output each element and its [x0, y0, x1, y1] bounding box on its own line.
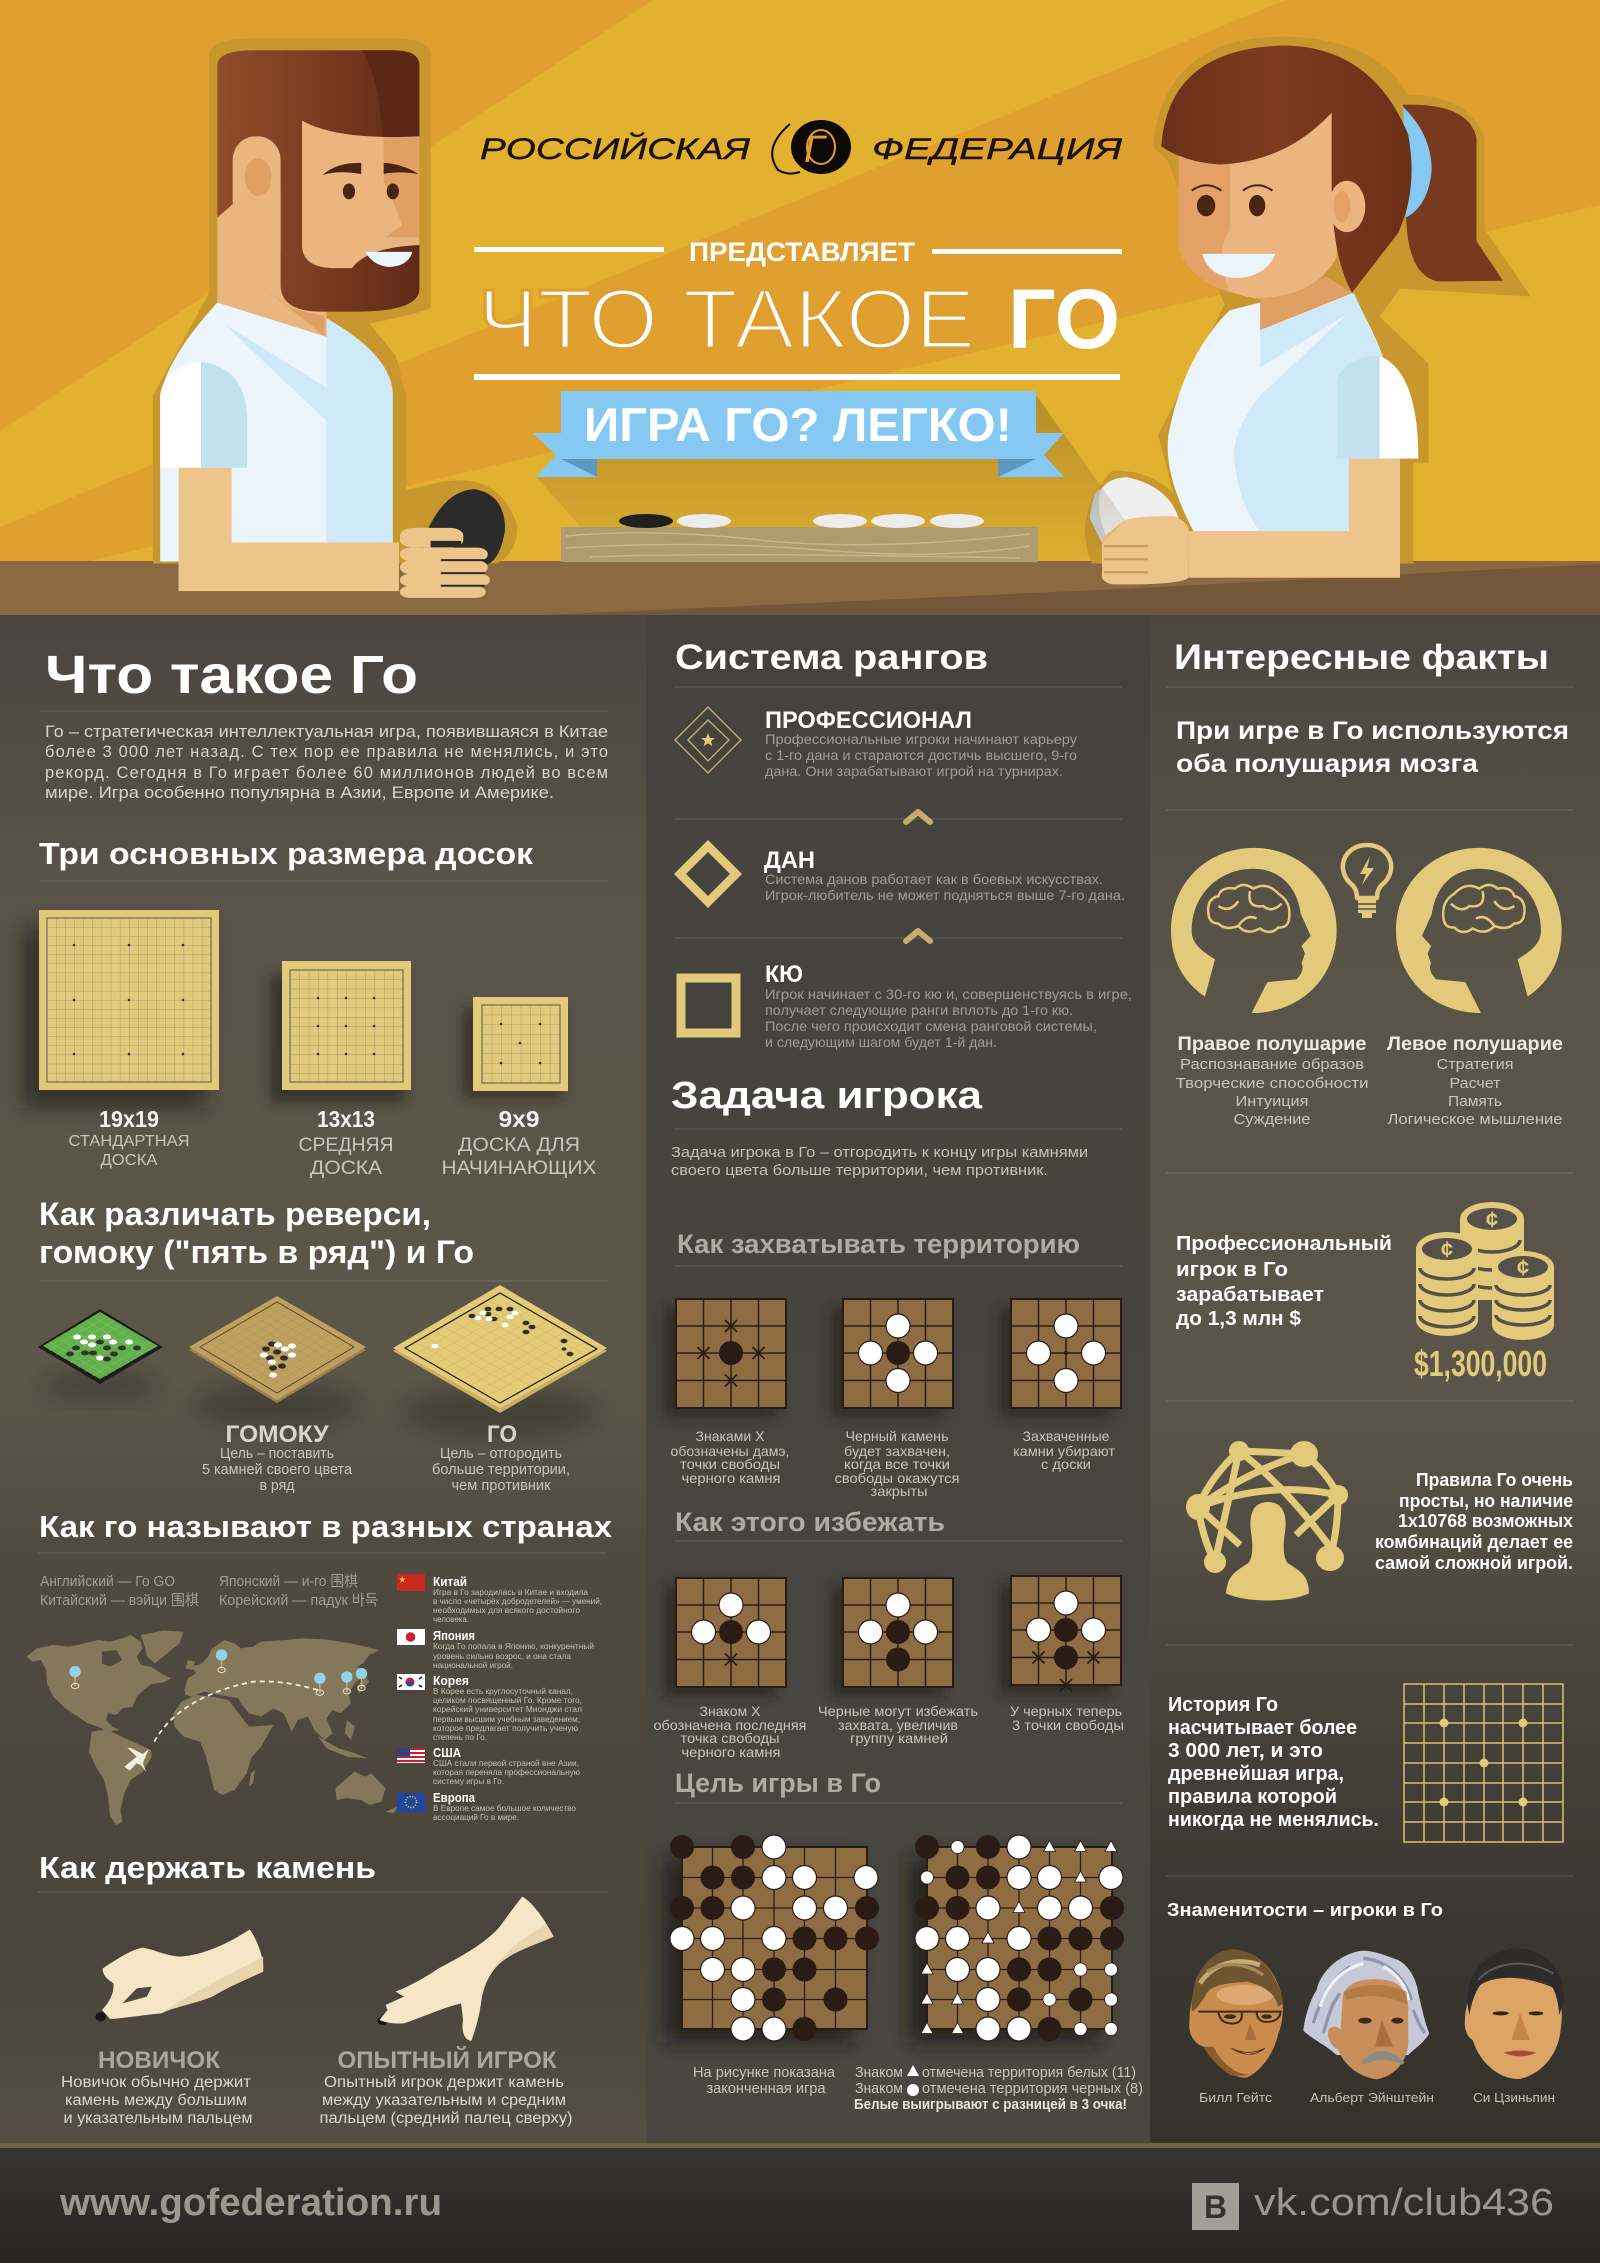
caption: three liberties: 3 точки свободы — [1012, 1717, 1124, 1733]
caption: liberties: обозначены дамэ, — [670, 1443, 790, 1459]
board size labels: 19x19 — [99, 1106, 159, 1132]
section: celebrity players — [1167, 1900, 1564, 2105]
rank: dan — [764, 847, 1125, 903]
fact: number of combinations: самой сложной игрой. — [1375, 1553, 1573, 1573]
title block: ПРЕДСТАВЛЯЕТ — [689, 237, 916, 267]
rank: kyu: После чего происходит смена ранговой системы, — [765, 1018, 1097, 1034]
section: celebrity players: Знаменитости – игроки в Го — [1167, 1900, 1443, 1920]
country descriptions: Китай — [433, 1575, 467, 1589]
board size labels: ДОСКА ДЛЯ — [458, 1135, 580, 1156]
country descriptions — [397, 1574, 602, 1822]
ribbon shadow — [536, 395, 1125, 561]
caption: surrounded stone — [834, 1428, 960, 1499]
section: rank system: Система рангов — [675, 638, 988, 677]
fact: both brain hemispheres — [1166, 717, 1573, 1173]
icon: network around a head — [1186, 1441, 1348, 1602]
caption: liberties — [670, 1428, 790, 1486]
section: player's goal — [671, 1075, 1122, 1179]
board size labels: НАЧИНАЮЩИХ — [442, 1158, 597, 1179]
section: player's goal: Задача игрока — [671, 1075, 983, 1117]
icon: coin stacks — [1416, 1202, 1554, 1340]
board size labels: 9x9 — [498, 1106, 540, 1132]
section: names of Go in countries: Как го называют в разных странах — [39, 1509, 613, 1544]
fact: both brain hemispheres: При игре в Го используются — [1176, 717, 1569, 745]
section: interesting facts heading: Интересные факты — [1174, 638, 1549, 677]
country descriptions: в число «четырёх добродетелей» — умений, — [433, 1596, 602, 1606]
right hemisphere list: Распознавание образов — [1180, 1056, 1364, 1073]
wooden board with stones — [561, 514, 1038, 562]
title block — [474, 237, 1122, 380]
board size labels: СРЕДНЯЯ — [298, 1135, 394, 1156]
panel: right column background — [1150, 615, 1600, 2143]
go caption: Цель – отгородить — [440, 1446, 562, 1462]
gomoku caption: в ряд — [260, 1478, 295, 1494]
diagram: extended group — [831, 1578, 953, 1696]
celebrity names: Си Цзиньпин — [1473, 2090, 1555, 2105]
fact: professional earnings: зарабатывает — [1176, 1284, 1324, 1306]
country descriptions: степень по Го. — [433, 1732, 487, 1742]
panel: centre column background — [646, 615, 1150, 2143]
section: three board sizes: Три основных размера досок — [39, 836, 534, 871]
section: what is Go: Что такое Го — [45, 645, 418, 705]
board size labels: 13x13 — [317, 1106, 375, 1132]
footer — [0, 2143, 1600, 2263]
caption: captured stone — [1013, 1428, 1116, 1472]
portrait: Bill Gates — [1189, 1949, 1283, 2078]
arrow: up chevron — [906, 931, 930, 941]
experienced caption: ОПЫТНЫЙ ИГРОК — [338, 2046, 557, 2074]
left hemisphere list — [1387, 1034, 1563, 1128]
caption: liberties: черного камня — [682, 1470, 780, 1486]
rank: professional: с 1-го дана и стараются достичь высшего, 9-го — [765, 747, 1077, 763]
flag: Korea — [397, 1674, 425, 1690]
section: objective of Go: Цель игры в Го — [675, 1768, 881, 1798]
rank: dan: Игрок-любитель не может подняться выше 7-го дана. — [765, 887, 1125, 903]
rank: dan: Система данов работает как в боевых искусствах. — [765, 871, 1103, 887]
caption: extended group: группу камней — [850, 1730, 948, 1746]
rank: kyu: КЮ — [765, 961, 803, 988]
gomoku caption — [202, 1421, 353, 1494]
fact: history of Go: 3 000 лет, и это — [1168, 1740, 1323, 1762]
country descriptions: Корея — [433, 1674, 469, 1688]
illustration: woman holding white stone — [1085, 36, 1531, 584]
caption: extended group: Черные могут избежать — [818, 1703, 978, 1719]
caption: three liberties: У черных теперь — [1010, 1703, 1122, 1719]
go caption: ГО — [487, 1421, 517, 1448]
fact: number of combinations: 1x10768 возможных — [1398, 1511, 1573, 1531]
rank: kyu: получает следующие ранги вплоть до 1-го кю. — [765, 1002, 1073, 1018]
diagram: captured stone removed — [999, 1299, 1121, 1417]
caption: finished game: законченная игра — [706, 2081, 826, 2097]
country descriptions: которая переняла профессиональную — [433, 1767, 581, 1777]
title block: ГО — [1008, 272, 1120, 366]
diagram: last liberty — [664, 1578, 786, 1696]
fact: number of combinations: Правила Го очень — [1416, 1470, 1573, 1490]
country descriptions: Япония — [433, 1629, 475, 1643]
beginner caption: камень между большим — [65, 2092, 247, 2109]
section: three board sizes — [22, 836, 608, 1179]
section: what is Go — [40, 645, 608, 802]
section: how to capture territory — [664, 1229, 1122, 1499]
caption: scoring legend: отмечена территория белых (11) — [922, 2065, 1136, 2081]
section: rank system — [675, 638, 1132, 1050]
logo: Russian Go Federation: ФЕДЕРАЦИЯ — [872, 133, 1123, 166]
gomoku caption: ГОМОКУ — [226, 1421, 330, 1448]
section: what is Go: мире. Игра особенно популярна в Азии, Европе и Америке. — [45, 784, 554, 802]
icon: kyu square — [681, 978, 736, 1033]
country descriptions: национальной игрой. — [433, 1660, 513, 1670]
section: what is Go: рекорд. Сегодня в Го играет более 60 миллионов людей во всем — [45, 764, 608, 782]
left hemisphere list: Левое полушарие — [1387, 1034, 1563, 1055]
icon: right hemisphere head — [1171, 848, 1337, 1013]
website address: www.gofederation.ru — [59, 2182, 442, 2224]
section: how to avoid capture: Как этого избежать — [675, 1507, 945, 1537]
right hemisphere list: Правое полушарие — [1178, 1034, 1366, 1055]
language list: Английский — Го GO — [40, 1573, 175, 1590]
country descriptions: необходимых для всякого достойного — [433, 1605, 580, 1615]
country descriptions: В Корее есть круглосуточный канал, — [433, 1686, 573, 1696]
header background — [0, 0, 1600, 620]
board size labels: ДОСКА — [310, 1158, 382, 1179]
country descriptions: В Европе самое большое количество — [433, 1803, 576, 1813]
ribbon: game go? easy! — [533, 391, 1064, 477]
fact: history of Go: насчитывает более — [1168, 1717, 1357, 1739]
section: names of Go in countries — [27, 1509, 613, 1825]
go caption — [432, 1421, 570, 1494]
caption: last liberty: обозначена последняя — [654, 1717, 806, 1733]
country descriptions: Когда Го попала в Японию, конкурентный — [433, 1641, 594, 1651]
country descriptions: США стали первой страной вне Азии, — [433, 1758, 579, 1768]
caption: captured stone: камни убирают — [1013, 1443, 1116, 1459]
right hemisphere list: Суждение — [1234, 1111, 1310, 1128]
board size labels: ДОСКА — [100, 1152, 158, 1169]
section: what is Go: Го – стратегическая интеллектуальная игра, появившаяся в Китае — [45, 723, 608, 741]
country descriptions: корейский университет Мионджи стал — [433, 1704, 582, 1714]
left hemisphere list: Стратегия — [1436, 1056, 1514, 1073]
right hemisphere list: Творческие способности — [1176, 1075, 1368, 1092]
map pins and flight route — [69, 1649, 367, 1772]
title block: ЧТО ТАКОЕ — [478, 272, 975, 366]
board size labels — [68, 1106, 597, 1179]
caption: scoring legend: Белые выигрывают с разницей в 3 очка! — [854, 2097, 1127, 2113]
fact: professional earnings: игрок в Го — [1176, 1259, 1288, 1281]
experienced caption: пальцем (средний палец сверху) — [320, 2110, 572, 2127]
diagram: surrounded stone — [831, 1299, 953, 1417]
caption: finished game: На рисунке показана — [693, 2065, 836, 2081]
section: player's goal: Задача игрока в Го – отгородить к концу игры камнями — [671, 1144, 1088, 1161]
go caption: чем противник — [452, 1478, 551, 1494]
hand: beginner — [95, 1929, 263, 2021]
world map — [27, 1631, 398, 1825]
icon: left hemisphere head — [1396, 848, 1562, 1013]
fact: professional earnings: до 1,3 млн $ — [1176, 1308, 1301, 1330]
icon: coin stacks: ¢ — [1486, 1207, 1498, 1232]
diagram: liberties — [664, 1299, 786, 1417]
flag: Europe — [397, 1793, 425, 1812]
rank: kyu — [765, 961, 1132, 1050]
gomoku caption: Цель – поставить — [220, 1446, 334, 1462]
experienced caption — [320, 2046, 572, 2127]
section: how to avoid capture — [654, 1507, 1124, 1760]
icon: coin stacks: ¢ — [1517, 1255, 1529, 1280]
left hemisphere list: Память — [1448, 1093, 1502, 1110]
diagram: three liberties — [999, 1576, 1121, 1694]
celebrity names — [1199, 2090, 1555, 2105]
section: how to hold a stone: Как держать камень — [39, 1850, 376, 1885]
section: reversi, gomoku and Go: Как различать реверси, — [39, 1196, 431, 1232]
rank: kyu: Игрок начинает с 30-го кю и, совершенствуясь в игре, — [765, 986, 1132, 1002]
caption: liberties: Знаками Х — [696, 1428, 765, 1444]
caption: three liberties — [1010, 1703, 1124, 1733]
portrait: Xi Jinping — [1465, 1948, 1564, 2079]
caption: surrounded stone: Черный камень — [846, 1428, 948, 1444]
go board — [393, 1285, 607, 1436]
right hemisphere list: Интуиция — [1236, 1093, 1308, 1110]
diagram: scored game — [909, 1835, 1124, 2043]
country descriptions: ассоциаций Го в мире. — [433, 1812, 519, 1822]
country descriptions: которое предлагает получить ученую — [433, 1723, 579, 1733]
section: reversi, gomoku and Go: гомоку ("пять в ряд") и Го — [39, 1234, 474, 1270]
section: reversi, gomoku and Go — [38, 1196, 608, 1494]
fact: number of combinations: комбинаций делает ее — [1375, 1532, 1573, 1552]
section: player's goal: своего цвета больше территории, чем противник. — [671, 1162, 1048, 1179]
country descriptions: целиком посвященный Го. Кроме того, — [433, 1695, 582, 1705]
fact: history of Go: История Го — [1168, 1694, 1278, 1716]
vk address: vk.com/club436 — [1254, 2182, 1554, 2224]
icon: light bulb — [1343, 845, 1391, 918]
caption: last liberty: точка свободы — [680, 1730, 780, 1746]
gomoku board — [189, 1296, 366, 1427]
rank: professional: ПРОФЕССИОНАЛ — [765, 707, 972, 734]
caption: surrounded stone: свободы окажутся — [834, 1470, 960, 1486]
caption: last liberty — [654, 1703, 806, 1760]
caption: liberties: точки свободы — [680, 1456, 780, 1472]
gomoku caption: 5 камней своего цвета — [202, 1462, 353, 1478]
reversi board — [38, 1309, 163, 1401]
caption: last liberty: черного камня — [682, 1744, 780, 1760]
flag: Japan — [397, 1629, 425, 1645]
country descriptions: первым высшим учебным заведением, — [433, 1714, 580, 1724]
section: how to capture territory: Как захватывать территорию — [677, 1229, 1080, 1259]
beginner caption: НОВИЧОК — [98, 2047, 220, 2074]
diagram: finished game — [664, 1835, 879, 2043]
fact: professional earnings: $1,300,000 — [1414, 1343, 1547, 1384]
rank: dan: ДАН — [764, 847, 815, 874]
country descriptions: Европа — [433, 1791, 476, 1805]
left hemisphere list: Логическое мышление — [1388, 1111, 1562, 1128]
icon: vk logo: B — [1204, 2189, 1227, 2225]
caption: extended group: захвата, увеличив — [838, 1717, 958, 1733]
header table — [0, 561, 1600, 617]
caption: last liberty: Знаком Х — [700, 1703, 761, 1719]
caption: scoring legend: отмечена территория черных (8) — [922, 2081, 1143, 2097]
board size labels: СТАНДАРТНАЯ — [68, 1133, 190, 1150]
logo: Russian Go Federation — [480, 120, 1123, 174]
section: objective of Go — [664, 1768, 1143, 2113]
caption: scoring legend: Знаком — [855, 2081, 903, 2097]
country descriptions: уровень сильно возрос, и она стала — [433, 1651, 571, 1661]
caption: scoring legend — [854, 2065, 1143, 2113]
section: what is Go: более 3 000 лет назад. С тех пор ее правила не менялись, и это — [45, 743, 608, 761]
caption: finished game — [693, 2065, 836, 2097]
language list: Китайский — вэйци 围棋 — [40, 1592, 199, 1609]
panel: left column background — [0, 615, 648, 2143]
icon: coin stacks: ¢ — [1441, 1237, 1453, 1262]
caption: captured stone: с доски — [1041, 1456, 1091, 1472]
celebrity names: Альберт Эйнштейн — [1310, 2090, 1434, 2105]
caption: scoring legend: Знаком — [855, 2065, 903, 2081]
icon: vk logo — [1192, 2183, 1239, 2230]
icon: professional diamond — [675, 707, 741, 773]
arrow: up chevron — [906, 812, 930, 822]
country descriptions: систему игры в Го. — [433, 1776, 504, 1786]
fact: history of Go: правила которой — [1168, 1786, 1337, 1808]
beginner caption: Новичок обычно держит — [61, 2074, 251, 2091]
board 19x19 — [22, 910, 219, 1108]
rank: professional: Профессиональные игроки начинают карьеру — [765, 731, 1077, 747]
caption: extended group — [818, 1703, 978, 1746]
right hemisphere list — [1176, 1034, 1368, 1128]
icon: dan diamond — [680, 846, 736, 902]
section: how to hold a stone — [37, 1850, 608, 2127]
rank: professional — [765, 707, 1077, 779]
fact: history of Go — [1166, 1684, 1573, 1876]
language list — [40, 1573, 378, 1609]
fact: professional earnings — [1166, 1202, 1573, 1401]
country descriptions: США — [433, 1746, 461, 1760]
portrait: Albert Einstein — [1303, 1951, 1429, 2079]
caption: surrounded stone: закрыты — [870, 1483, 928, 1499]
fact: number of combinations — [1166, 1441, 1573, 1645]
country descriptions: Игра в Го зародилась в Китае и входила — [433, 1587, 588, 1597]
flag: China — [397, 1574, 425, 1591]
logo: Russian Go Federation: Г — [804, 129, 828, 171]
fact: history of Go: никогда не менялись. — [1168, 1809, 1379, 1831]
celebrity names: Билл Гейтс — [1199, 2090, 1273, 2105]
experienced caption: между указательным и средним — [322, 2092, 566, 2109]
rank: professional: дана. Они зарабатывают игрой на турнирах. — [765, 763, 1063, 779]
caption: surrounded stone: будет захвачен, — [844, 1443, 950, 1459]
illustration: man holding black stone — [153, 38, 517, 598]
fact: professional earnings: Профессиональный — [1176, 1233, 1392, 1255]
fact: both brain hemispheres: оба полушария мозга — [1176, 750, 1479, 778]
experienced caption: Опытный игрок держит камень — [324, 2074, 564, 2091]
rank: kyu: и следующим шагом будет 1-й дан. — [765, 1034, 997, 1050]
board 13x13 — [270, 961, 411, 1103]
country descriptions: человека. — [433, 1614, 469, 1624]
caption: captured stone: Захваченные — [1022, 1428, 1110, 1444]
ribbon: game go? easy!: ИГРА ГО? ЛЕГКО! — [584, 398, 1012, 451]
logo: Russian Go Federation: РОССИЙСКАЯ — [480, 132, 751, 166]
fact: number of combinations: просты, но наличие — [1399, 1491, 1573, 1511]
beginner caption: и указательным пальцем — [64, 2110, 252, 2127]
left hemisphere list: Расчет — [1450, 1075, 1501, 1092]
language list: Японский — и-го 围棋 — [219, 1573, 358, 1590]
board 9x9 — [463, 997, 568, 1098]
beginner caption — [61, 2047, 252, 2127]
icon: go board grid — [1404, 1684, 1563, 1842]
fact: history of Go: древнейшая игра, — [1168, 1763, 1344, 1785]
go caption: больше территории, — [432, 1462, 570, 1478]
flag: USA — [397, 1748, 425, 1763]
caption: surrounded stone: когда все точки — [844, 1456, 950, 1472]
hand: experienced — [377, 1897, 554, 2041]
language list: Корейский — падук 바둑 — [219, 1592, 378, 1609]
